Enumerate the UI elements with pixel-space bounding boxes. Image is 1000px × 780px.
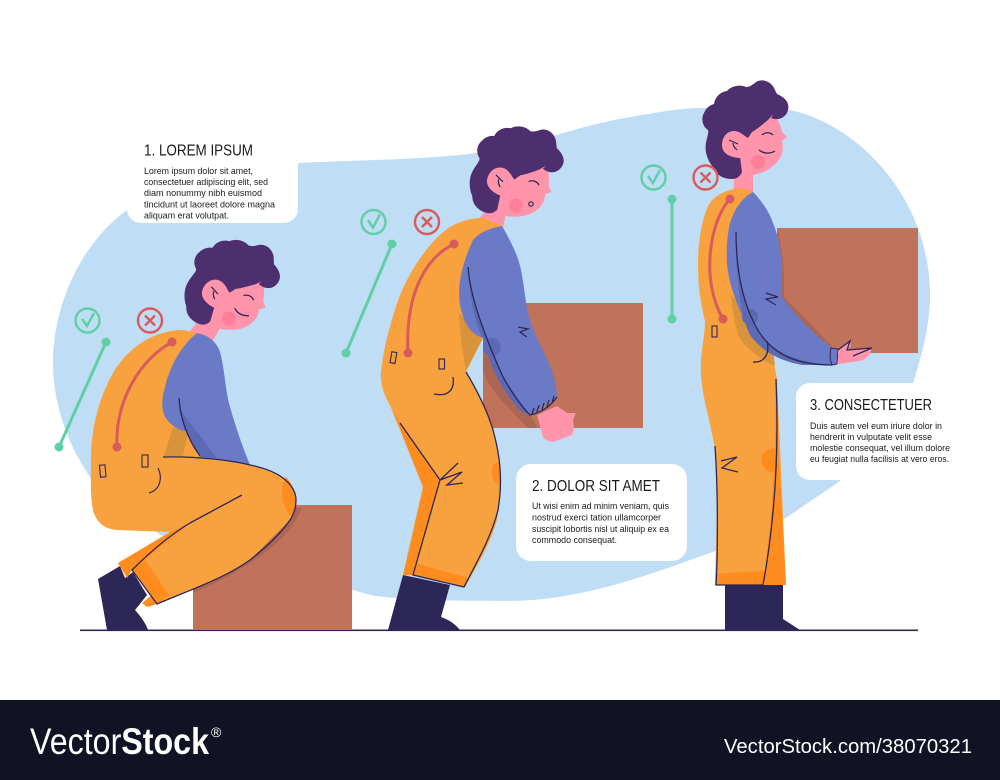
icon: check 1: [76, 308, 100, 332]
mouth 2: [529, 202, 533, 206]
icon: cross 3: [694, 166, 718, 190]
callout 1 body: consectetuer adipiscing elit, sed: [144, 177, 268, 188]
callout 1 body: aliquam erat volutpat.: [144, 210, 229, 222]
spine curve 1: [112, 338, 176, 452]
icon: check 2: [362, 210, 386, 234]
boot 2: [388, 575, 460, 630]
boot 3: [725, 585, 800, 630]
callout 1 body: [144, 166, 276, 222]
hand 2: [537, 406, 576, 442]
box 3: [777, 228, 918, 353]
boot 1: [98, 566, 148, 630]
neck 1: [188, 318, 222, 342]
icon: cross 2: [415, 210, 439, 234]
arm 2: [459, 226, 557, 415]
arm 1: [162, 333, 250, 465]
background blob: [53, 105, 930, 601]
cuff 3: [830, 348, 838, 365]
neck 2: [478, 205, 507, 228]
head 1: [171, 222, 290, 347]
callout 2 body: nostrud exerci tation ullamcorper: [532, 512, 661, 524]
head 3: [702, 80, 788, 179]
callout 3 body: Duis autem vel eum iriure dolor in: [810, 421, 942, 432]
icon: cross 1: [138, 308, 162, 332]
outlines 3: [715, 232, 872, 585]
box 1: [193, 505, 352, 630]
callout 2 body: commodo consequat.: [532, 535, 617, 546]
callout 1 body: diam nonummy nibh euismod: [144, 188, 262, 199]
callout 1 heading: 1. LOREM IPSUM: [144, 142, 253, 160]
registered mark: ®: [211, 724, 222, 740]
outlines 1: [132, 457, 296, 604]
callout 1: lorem ipsum: [127, 120, 298, 223]
outlines 2: [400, 267, 557, 587]
icon: check 3: [642, 166, 666, 190]
callout 2 body: Ut wisi enim ad minim veniam, quis: [532, 501, 669, 512]
spine curve 2: [404, 240, 458, 358]
callout 3 body: [810, 421, 950, 465]
ground line: [80, 630, 918, 631]
arm 3: [727, 192, 833, 365]
overalls 1: [91, 330, 296, 604]
posture guide 1: [54, 338, 110, 452]
figure 2: bending worker: [342, 110, 643, 630]
overalls 2: [381, 218, 502, 587]
spine curve 3: [710, 194, 734, 324]
callout 3 heading: 3. CONSECTETUER: [810, 397, 932, 414]
overalls 3: [698, 188, 786, 585]
footer bar: [0, 700, 1000, 780]
hand 3: [838, 341, 872, 364]
footer logo: VectorStock: [30, 721, 209, 762]
callout 3: consectetuer: [796, 383, 1000, 480]
callout 2 heading: 2. DOLOR SIT AMET: [532, 478, 660, 495]
callout 3 body: molestie consequat, vel illum dolore: [810, 443, 950, 454]
callout 2 body: suscipit lobortis nisl ut aliquip ex ea: [532, 524, 670, 535]
callout 2 body: [532, 501, 670, 546]
box 2: [483, 303, 643, 428]
callout 2: dolor sit amet: [516, 464, 687, 561]
callout 3 body: hendrerit in vulputate velit esse: [810, 432, 932, 443]
figure 3: upright worker: [642, 80, 918, 630]
posture guide 3: [668, 194, 676, 324]
neck 3: [733, 168, 753, 196]
figure 1: squatting worker: [54, 222, 352, 630]
posture guide 2: [342, 240, 396, 358]
footer id: VectorStock.com/38070321: [724, 736, 972, 758]
callout 3 body: eu feugiat nulla facilisis at vero eros.: [810, 454, 949, 465]
callout 1 body: tincidunt ut laoreet dolore magna: [144, 200, 276, 210]
callout 1 body: Lorem ipsum dolor sit amet,: [144, 166, 253, 177]
head 2: [458, 110, 572, 232]
